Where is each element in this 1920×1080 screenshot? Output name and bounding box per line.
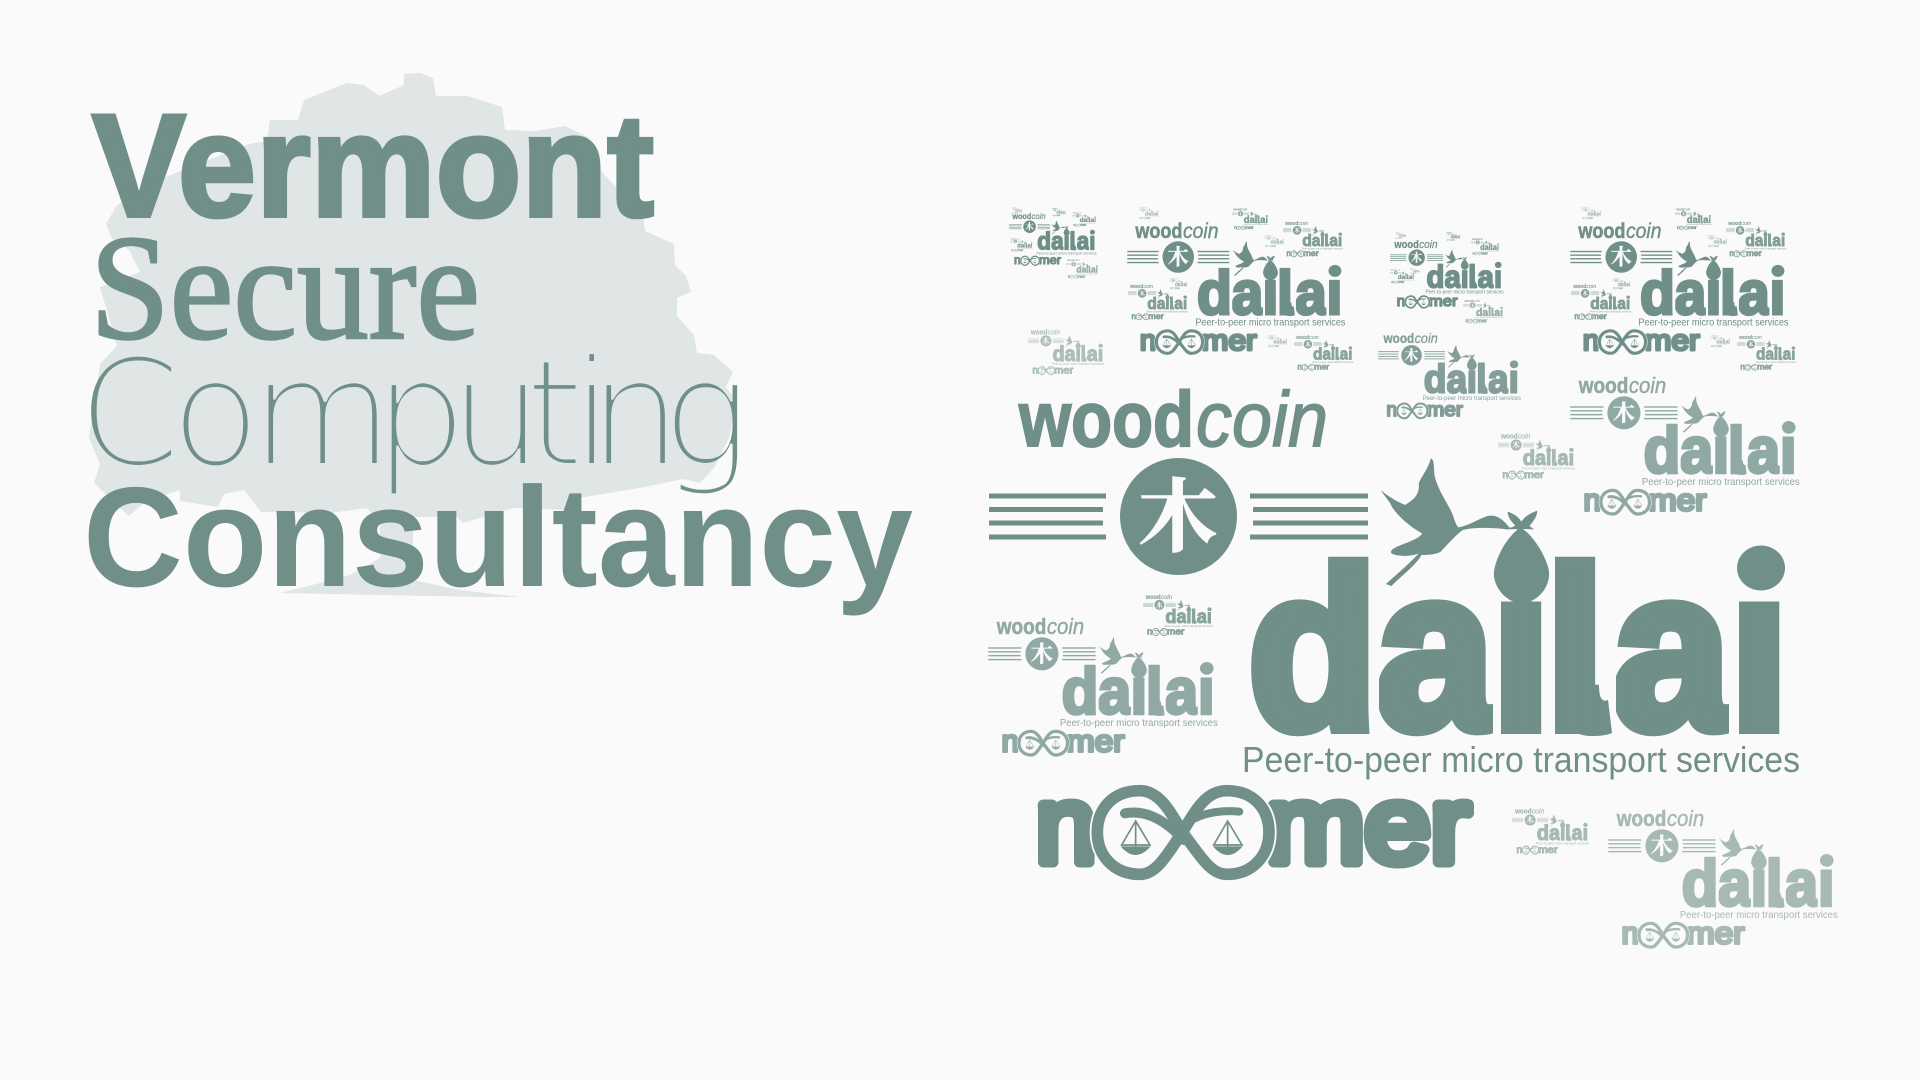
satellite lockups: small top left group — [1010, 207, 1099, 279]
lockup: top right — [1570, 220, 1789, 357]
Vermont state map silhouette — [89, 73, 737, 597]
logo wall — [988, 207, 1838, 951]
woodcoin wordmark: wood — [1018, 375, 1194, 463]
lockup: right middle — [1570, 373, 1800, 518]
lockup: centre medium — [1378, 331, 1521, 421]
satellite lockups: top centre group — [1128, 207, 1354, 371]
lockup: bottom right — [1608, 806, 1838, 951]
main logo lockup — [989, 375, 1800, 885]
woodcoin wordmark: coin — [1196, 375, 1328, 463]
lockup: faint left — [1028, 327, 1105, 376]
lockup: faint centre — [1498, 431, 1575, 481]
noomer wordmark: n — [1036, 764, 1096, 885]
title line: Secure: Secure — [90, 205, 480, 371]
noomer wordmark — [1036, 764, 1470, 885]
lockup: lower left — [988, 614, 1218, 759]
lockup: small top left — [1009, 211, 1097, 267]
dailai tagline: Peer-to-peer micro transport services — [1242, 739, 1800, 780]
dailai wordmark: dailai — [1248, 522, 1789, 777]
satellite lockups: top right group — [1571, 207, 1797, 371]
icon: woodcoin kanji: 木 — [1138, 473, 1218, 562]
title line: Vermont: Vermont — [92, 84, 654, 247]
satellite lockups: small centre group — [1390, 232, 1504, 325]
lockup: above lower left — [1143, 594, 1213, 637]
title line: Computing: Computing — [78, 329, 750, 499]
lockup: small centre — [1390, 239, 1504, 310]
title line: Consultancy: Consultancy — [83, 458, 913, 617]
lockup: beside bottom right — [1512, 806, 1589, 856]
woodcoin wordmark — [1018, 375, 1328, 463]
infographic canvas — [88, 73, 1838, 949]
title — [78, 84, 913, 617]
noomer wordmark: mer — [1266, 764, 1470, 885]
lockup: top centre — [1127, 220, 1346, 357]
